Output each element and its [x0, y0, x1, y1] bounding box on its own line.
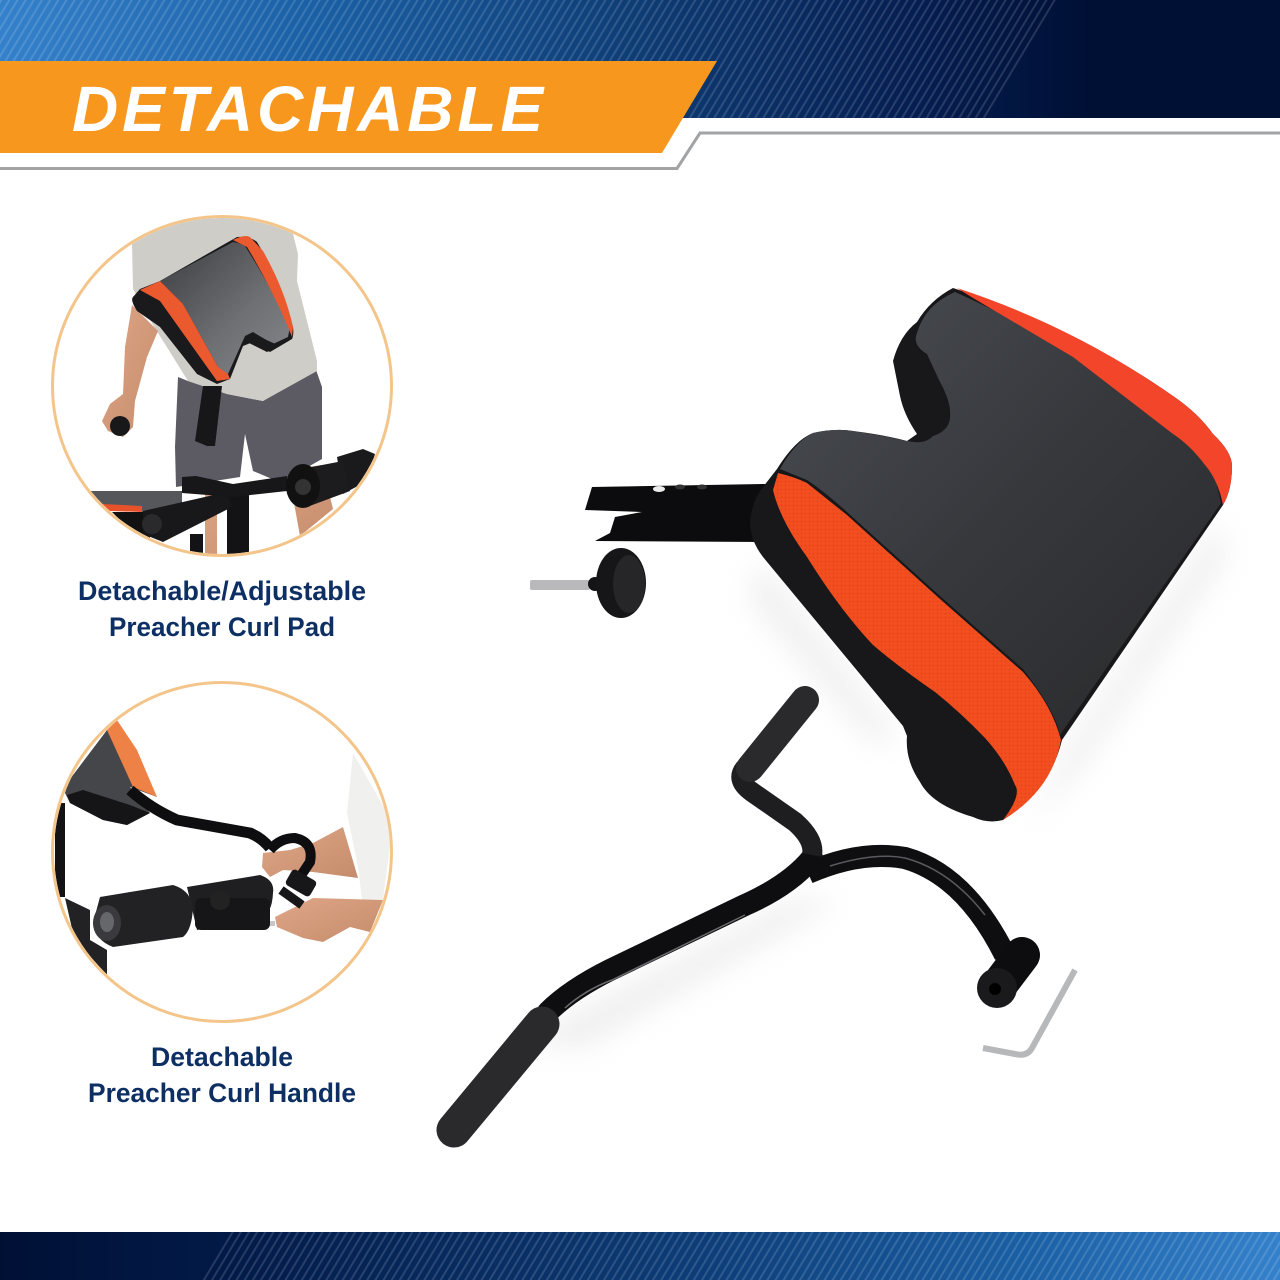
legs: [205, 465, 333, 556]
red side upper: [957, 288, 1232, 505]
post: [195, 386, 222, 446]
mini pad: [65, 730, 157, 825]
caption: pad: [78, 576, 366, 642]
shirt: [132, 214, 317, 401]
product: knob and bolt: [530, 548, 646, 618]
bench: [90, 491, 182, 512]
caption: pad: Detachable/Adjustable: [78, 576, 366, 606]
photo circle: preacher curl handle: [50, 680, 394, 1024]
arm upper: [262, 827, 358, 878]
handle collar: [997, 955, 1022, 988]
product: mounting tube: [585, 484, 765, 542]
red side lower: [773, 473, 1061, 820]
arm: [102, 305, 158, 437]
shirt: [347, 753, 393, 900]
frame: [65, 898, 107, 975]
caption: handle: [88, 1042, 356, 1108]
header background band: [0, 0, 1280, 118]
pad body: [750, 288, 1232, 821]
arm lower: [275, 898, 383, 942]
shorts: [175, 367, 322, 487]
caption: handle: Preacher Curl Handle: [88, 1078, 356, 1108]
handle tube: [130, 790, 270, 848]
product: preacher curl handle: [454, 700, 1022, 1130]
rollers: [337, 449, 375, 494]
post frame: [227, 495, 249, 554]
footer band: [0, 1232, 1280, 1280]
knob: [110, 416, 130, 436]
pad top surface: [780, 292, 1221, 735]
photo circle: preacher curl pad: [50, 214, 394, 558]
caption: pad: Preacher Curl Pad: [109, 612, 335, 642]
soft shadows: [520, 520, 1225, 1050]
allen key: [270, 921, 275, 926]
header divider line: [0, 133, 1280, 168]
upper grip: [750, 700, 805, 768]
title banner: [0, 61, 717, 153]
product: preacher curl pad: [750, 288, 1232, 821]
caption: handle: Detachable: [151, 1042, 293, 1072]
rollers: [187, 875, 273, 930]
product: hex key: [983, 970, 1075, 1055]
lower grip: [454, 1024, 542, 1130]
mini pad: [132, 237, 293, 384]
title: DETACHABLE: [72, 73, 545, 145]
